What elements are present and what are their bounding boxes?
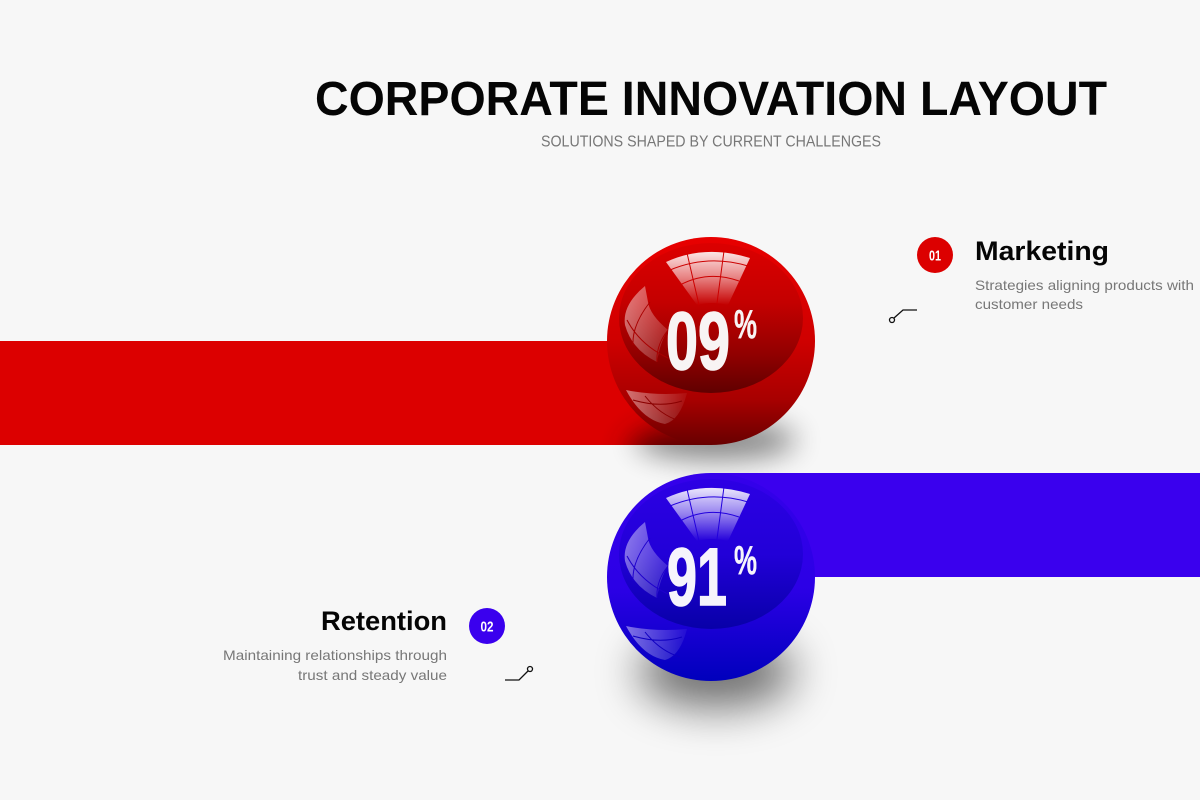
badge 01: 01 — [929, 248, 941, 264]
description: Maintaining relationships through — [223, 647, 447, 663]
inner lens — [619, 479, 803, 629]
shadow: red sphere — [636, 420, 796, 460]
description — [223, 647, 447, 683]
badge 01 — [917, 237, 953, 273]
connector icon — [505, 666, 532, 680]
value: % — [734, 537, 757, 583]
sphere: blue 91% — [607, 473, 815, 681]
sphere body — [607, 473, 815, 681]
description: customer needs — [975, 296, 1083, 312]
subtitle: SOLUTIONS SHAPED BY CURRENT CHALLENGES — [541, 134, 881, 150]
heading: Retention — [321, 606, 447, 636]
connector icon — [890, 310, 917, 322]
sphere: red 09% — [607, 237, 815, 445]
gloss: left — [625, 522, 668, 598]
gloss: left — [625, 286, 668, 362]
red band — [0, 341, 710, 445]
title: CORPORATE INNOVATION LAYOUT — [315, 73, 1107, 126]
value: % — [734, 301, 757, 347]
gloss: bottom — [626, 390, 687, 424]
description: trust and steady value — [298, 667, 447, 683]
value: 91 — [667, 532, 727, 623]
heading: Marketing — [975, 236, 1109, 266]
badge 02: 02 — [480, 618, 494, 636]
description: Strategies aligning products with — [975, 277, 1194, 293]
description — [975, 277, 1194, 312]
sphere body — [607, 237, 815, 445]
value: 09 — [666, 296, 730, 387]
gloss: bottom — [626, 626, 687, 660]
callout: marketing — [890, 236, 1194, 322]
callout: retention — [223, 606, 532, 683]
gloss: top fan — [666, 487, 750, 541]
gloss: top fan — [666, 251, 750, 305]
shadow: blue sphere — [638, 636, 794, 708]
inner lens — [619, 243, 803, 393]
blue band — [711, 473, 1200, 577]
badge 02 — [469, 608, 505, 644]
